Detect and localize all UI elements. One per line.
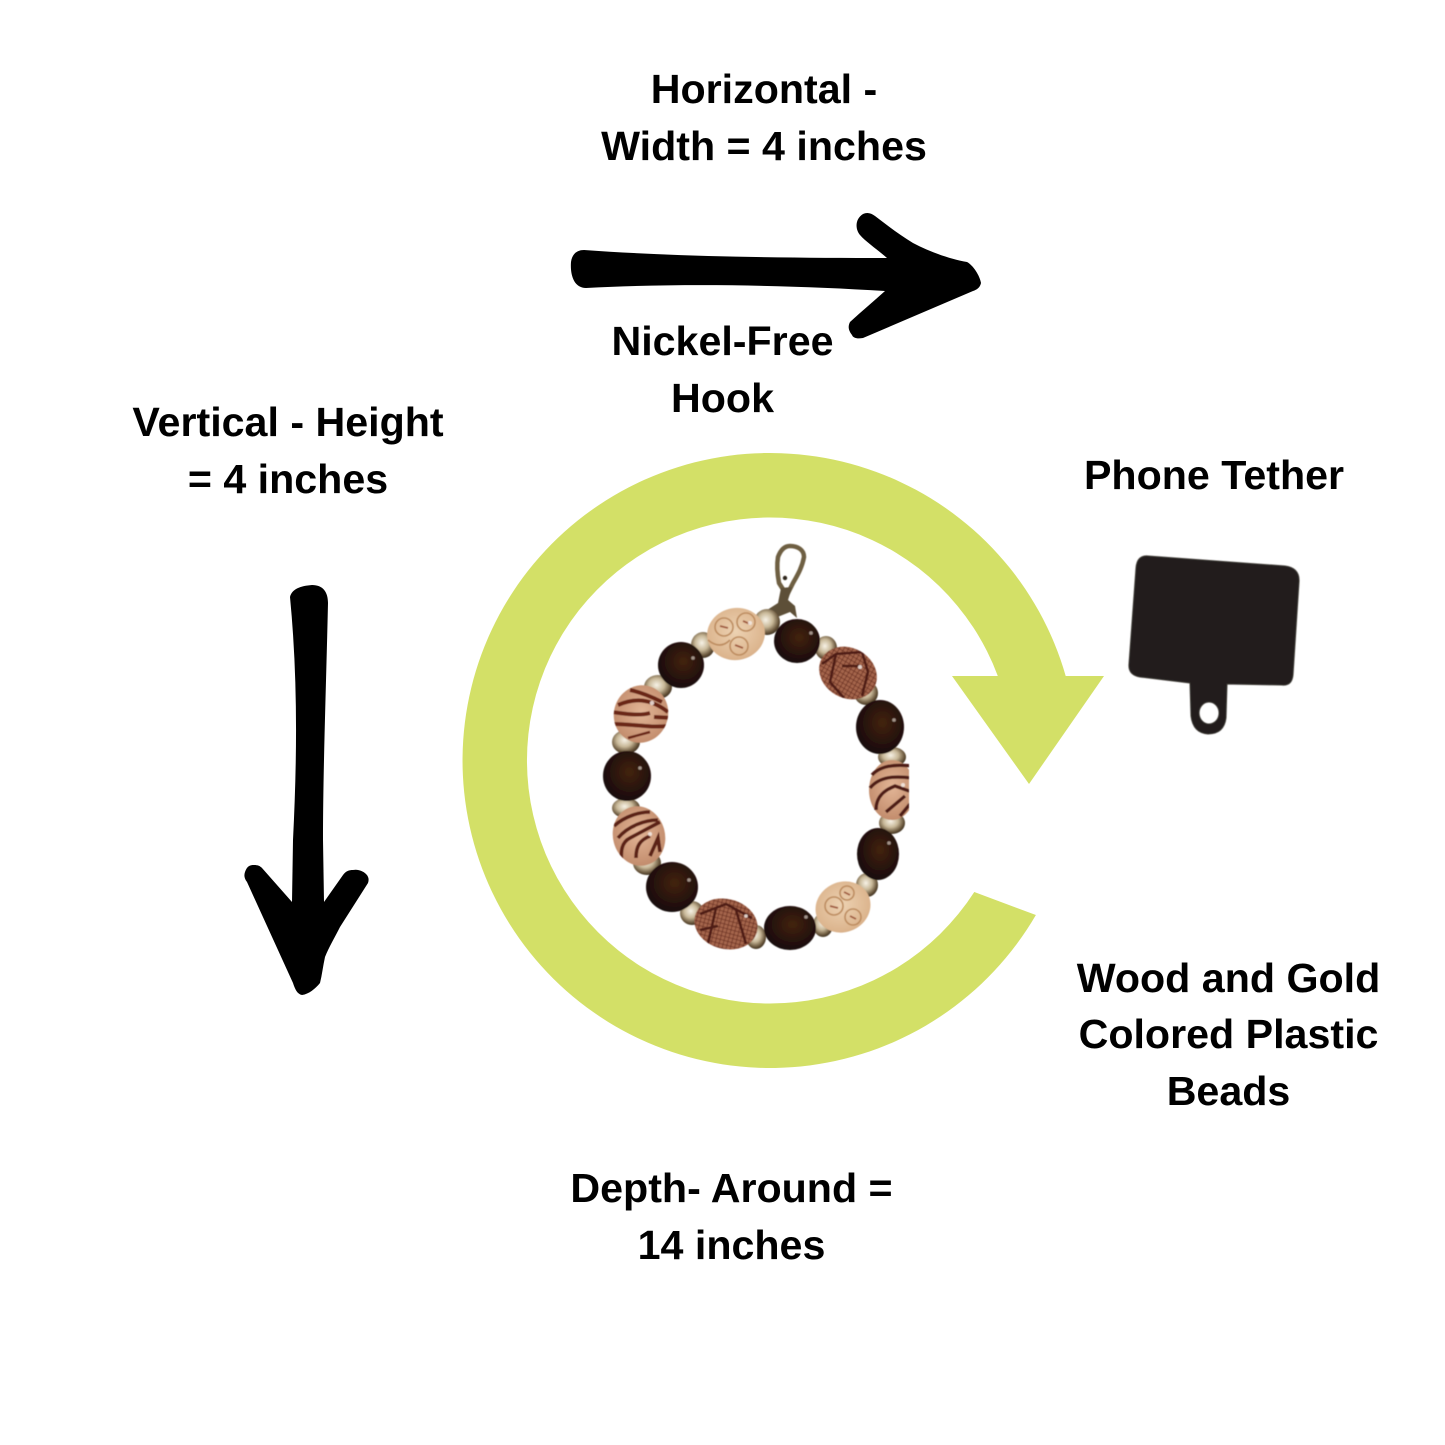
arrow: horizontal width	[571, 213, 981, 338]
label: nickel-free hook	[611, 318, 834, 421]
label: depth around: 14 inches	[638, 1222, 825, 1268]
label: vertical height	[132, 399, 444, 502]
label: phone tether: Phone Tether	[1084, 452, 1344, 498]
label: wood and gold beads: Wood and Gold	[1077, 954, 1380, 1000]
glossy highlights on patterned beads	[648, 621, 905, 918]
label: wood and gold beads: Beads	[1167, 1068, 1290, 1114]
label: nickel-free hook: Hook	[671, 375, 774, 421]
dark wood beads	[603, 619, 904, 950]
circular arrow: depth around	[463, 453, 1104, 1068]
label: horizontal width: Width = 4 inches	[601, 123, 927, 169]
nickel-free hook	[764, 546, 804, 620]
bracelet with hook and beads	[603, 546, 915, 956]
label: horizontal width	[601, 66, 927, 169]
label: nickel-free hook: Nickel-Free	[611, 318, 834, 364]
arrow: vertical height	[244, 585, 369, 995]
phone tether	[1129, 556, 1299, 734]
label: wood and gold beads: Colored Plastic	[1079, 1011, 1378, 1057]
gold spacer beads	[612, 609, 906, 949]
label: wood and gold beads	[1076, 954, 1380, 1114]
red patterned beads	[689, 636, 886, 956]
label: vertical height: = 4 inches	[188, 456, 388, 502]
label: depth around	[570, 1165, 893, 1268]
label: vertical height: Vertical - Height	[132, 399, 444, 445]
zebra striped beads	[606, 678, 915, 872]
tan carved beads	[703, 603, 879, 941]
label: depth around: Depth- Around =	[570, 1165, 893, 1211]
label: horizontal width: Horizontal -	[651, 66, 877, 112]
bead highlights	[638, 631, 896, 919]
